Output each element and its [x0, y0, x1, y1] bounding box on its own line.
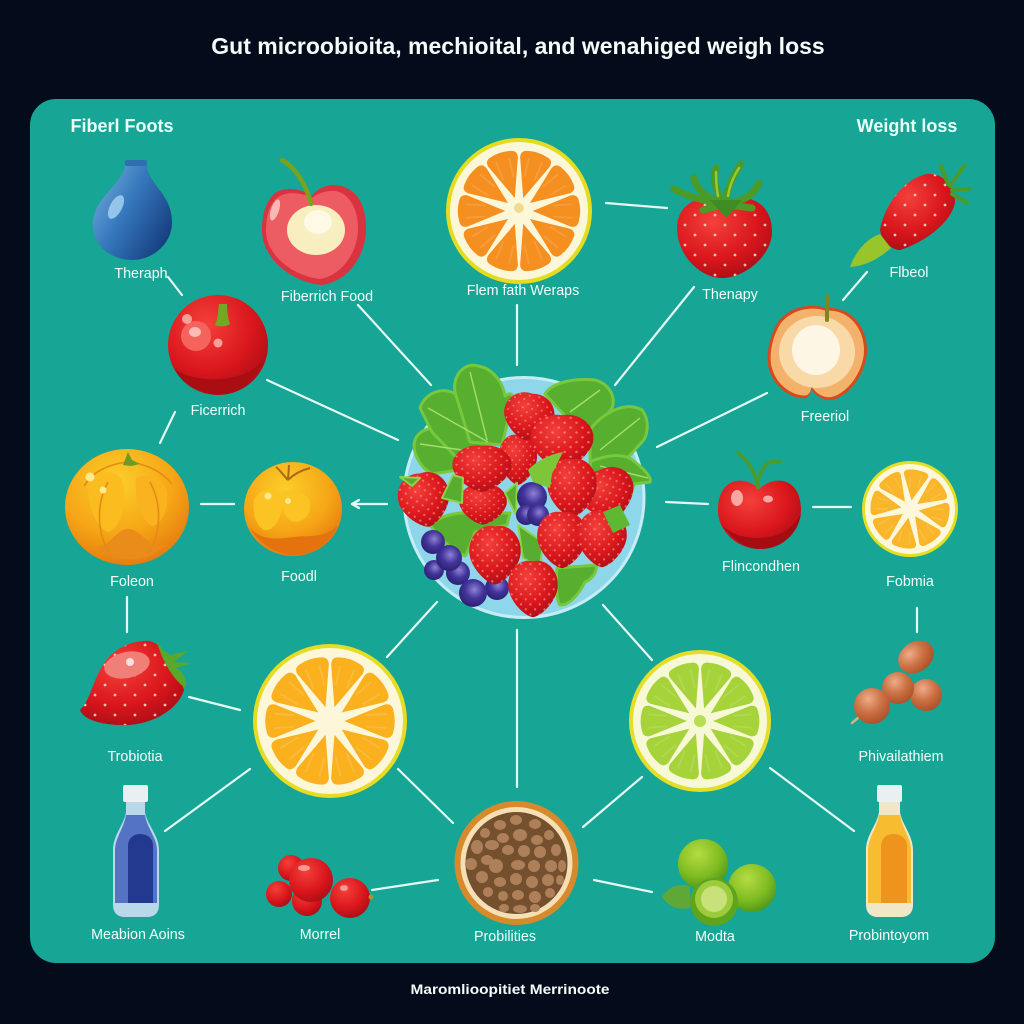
icon: large orange: [65, 449, 189, 565]
icon: blue bottle: [113, 785, 159, 917]
label: freeriol: Freeriol: [801, 409, 849, 425]
footer caption: Maromlioopitiet Merrinoote: [410, 981, 610, 997]
icon: orange bottle: [866, 785, 913, 917]
salad: calyx: [603, 505, 630, 533]
icon: orange slice large: [246, 639, 414, 803]
salad: green cap: [528, 452, 563, 488]
icon: tilted strawberry top right: [850, 166, 969, 267]
label: morel: Morrel: [300, 927, 340, 943]
icon: small orange: [244, 462, 342, 556]
icon: red apple: [168, 295, 268, 395]
label: fiberrich food: Fiberrich Food: [281, 289, 373, 305]
icon: halved apple right: [768, 296, 867, 400]
icon: halved red apple: [262, 160, 366, 285]
salad: leaf veins: [420, 372, 648, 478]
icon: bowl of lentils: [454, 801, 578, 925]
icon: orange slice top: [440, 133, 598, 289]
label: therapy right: Thenapy: [702, 287, 759, 303]
label: phivailathem: Phivailathiem: [858, 749, 944, 765]
salad: center leaves: [400, 475, 543, 567]
salad: center blueberries: [516, 482, 549, 526]
label: fiincondhen: Flincondhen: [722, 559, 800, 575]
icon: strawberry top right: [674, 164, 772, 278]
panel: main teal panel: [30, 99, 995, 963]
icon: brown skewer: [852, 634, 942, 724]
label: meabion aoins: Meabion Aoins: [91, 927, 185, 943]
icon: green limes: [662, 839, 776, 926]
label: fiber therapy: Flem fath Weraps: [467, 283, 579, 299]
heading: weight loss: Weight loss: [857, 116, 957, 136]
label: fobmia: Fobmia: [886, 574, 934, 590]
salad: blueberries lower: [421, 530, 509, 607]
label: probintorom: Probintoyom: [849, 928, 929, 944]
salad: lettuce: [414, 365, 650, 605]
salad: strawberries back: [499, 435, 537, 485]
icon: lime slice: [623, 646, 777, 796]
title: Gut microobioita, mechioital, and wenahiged weigh loss: [211, 33, 825, 59]
heading: fiber foods: Fiberl Foots: [70, 116, 174, 136]
label: probilities: Probilities: [474, 929, 536, 945]
label: food: Foodl: [281, 569, 317, 585]
label: foleon: Foleon: [110, 574, 154, 590]
connector lines: [127, 203, 917, 892]
icon: strawberry left: [80, 641, 192, 725]
icon: red berries: [266, 855, 374, 918]
icon: red apple right: [718, 453, 801, 549]
label: trobiotia: Trobiotia: [107, 749, 163, 765]
icon: blue flask: [93, 160, 172, 260]
label: fiberrich: Ficerrich: [191, 403, 245, 419]
icon: small lemon slice: [862, 461, 958, 557]
label: modta: Modta: [695, 929, 735, 945]
illustration: central salad bowl: [394, 365, 650, 618]
salad: plate: [404, 378, 644, 618]
label: therapy left: Theraph: [114, 266, 168, 282]
label: fibeoil: Flbeol: [890, 265, 928, 281]
